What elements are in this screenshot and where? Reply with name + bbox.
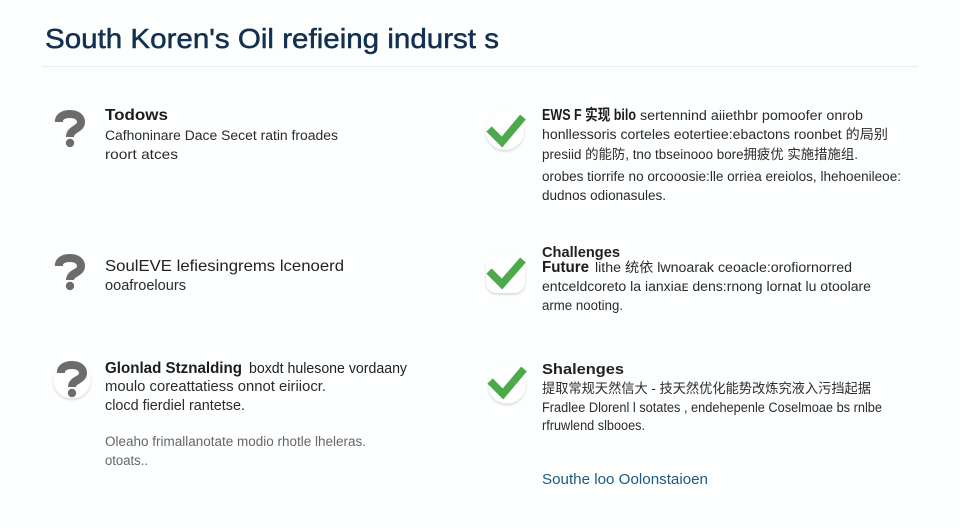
- text block: global standing: Glonlad Stznalding: [105, 360, 242, 377]
- icon: question mark: [59, 114, 81, 147]
- text block: refining: SoulEVE lefiesingrems lcenoerd: [105, 258, 344, 275]
- text block: todows: [105, 107, 338, 162]
- panel: todows: [59, 107, 338, 162]
- icon: green check in circle: [488, 366, 526, 404]
- text block: challenges: entceldcoreto la ianxiaᴇ dens:rnong lornat lu otoolare: [542, 279, 871, 294]
- text block: shalenges: rfruwlend slbooes.: [542, 418, 645, 433]
- text block: global standing: clocd fierdiel rantetse.: [105, 398, 245, 414]
- panel: global standing: [54, 360, 407, 468]
- icon: question mark in circle: [54, 362, 90, 398]
- text block: EWS: honllessoris corteles eotertiee:ebactons roonbet 的局别: [542, 127, 888, 142]
- panel: EWS: [486, 105, 901, 203]
- text block: EWS: presiid 的能防, tno tbseinooo bore拥疲优 实施措施组.: [542, 146, 858, 162]
- text block: EWS: [542, 105, 901, 203]
- text block: shalenges: Fradlee Dlorenl l sotates , endehepenle Coselmoae bs rnlbe: [542, 400, 882, 415]
- text block: refining: ooafroelours: [105, 278, 186, 294]
- title: South Koren's Oil refieing indurst s: [45, 23, 499, 54]
- text block: EWS: EWS F 实现 bilo: [542, 105, 636, 124]
- text block: todows: Cafhoninare Dace Secet ratin froades: [105, 128, 338, 143]
- text block: shalenges: [542, 361, 882, 433]
- text block: todows: Todows: [105, 107, 168, 124]
- icon: green check in circle: [486, 112, 524, 150]
- text block: challenges: Challenges: [542, 244, 620, 261]
- icon: question mark: [59, 258, 81, 290]
- text block: EWS: orobes tiorrife no orcooosie:lle orriea ereiolos, lhehoenileoe:: [542, 169, 901, 184]
- text block: global standing: boxdt hulesone vordaany: [249, 360, 407, 377]
- note text: [105, 434, 366, 468]
- panel: challenges: [486, 244, 871, 313]
- note text: Oleaho frimallanotate modio rhotle lheleras.: [105, 434, 366, 449]
- text block: challenges: arme nooting.: [542, 298, 623, 313]
- text block: challenges: [542, 244, 871, 313]
- note text: otoats..: [105, 453, 148, 468]
- text block: shalenges: Shalenges: [542, 361, 624, 378]
- icon: green check on tile: [486, 256, 525, 293]
- text block: EWS: sertennind aiiethbr pomoofer onrob: [640, 108, 863, 123]
- panel: shalenges: [488, 361, 882, 488]
- footer link text: Southe loo Oolonstaioen: [542, 472, 708, 488]
- text block: refining: [105, 258, 344, 294]
- panel: refining: [59, 258, 344, 294]
- text block: challenges: lithe 统依 lwnoarak ceoacle:orofiornorred: [595, 260, 852, 275]
- text block: todows: roort atces: [105, 146, 178, 162]
- text block: global standing: [105, 360, 407, 414]
- text block: EWS: dudnos odionasules.: [542, 188, 666, 203]
- text block: challenges: Future: [542, 259, 589, 276]
- text block: shalenges: 提取常规天然信大 - 技天然优化能势改炼究液入污挡起据: [542, 380, 871, 396]
- text block: global standing: moulo coreattatiess onnot eiriiocr.: [105, 379, 326, 395]
